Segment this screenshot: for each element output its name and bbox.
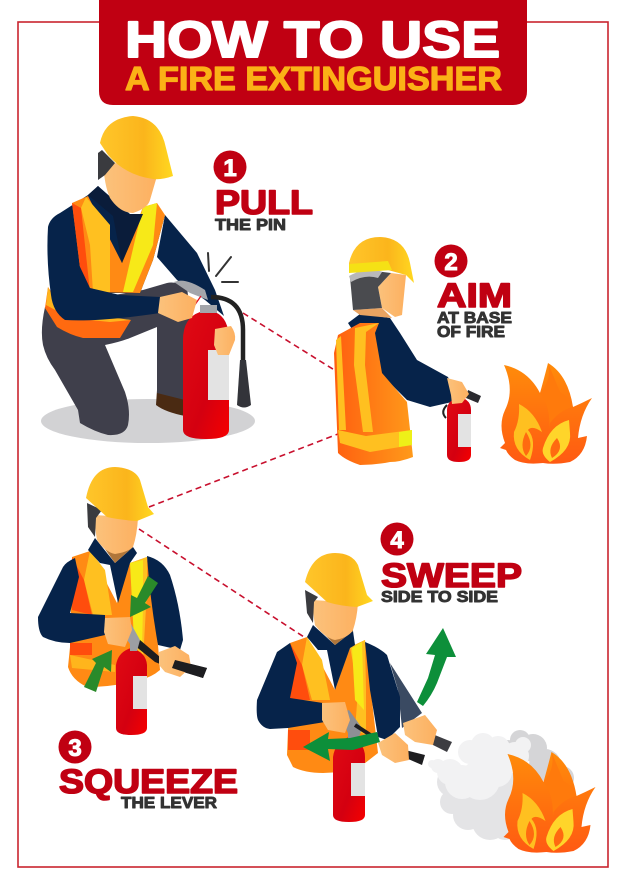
- connector: step 2 to step 3: [149, 434, 338, 507]
- subheading: THE LEVER: [121, 795, 217, 812]
- hat band shade: [349, 269, 382, 282]
- subheading: SIDE TO SIDE: [381, 589, 498, 606]
- hair: [87, 503, 102, 537]
- number badge: [380, 522, 414, 556]
- motion marks: [208, 253, 238, 282]
- hair: [98, 150, 115, 180]
- ghost hand: [403, 715, 437, 745]
- hose and handle: [134, 640, 207, 678]
- title line 2: A FIRE EXTINGUISHER: [125, 60, 502, 97]
- extinguisher label: [133, 676, 147, 709]
- torso shirt: [48, 186, 165, 293]
- neck and collar: [88, 186, 143, 263]
- step 2 illustration: worker aiming: [334, 237, 481, 465]
- shirt: [348, 314, 455, 407]
- number badge: [58, 730, 92, 764]
- neck: [353, 308, 392, 318]
- face: [378, 273, 406, 317]
- hair: [305, 590, 318, 623]
- valve lever: [123, 622, 140, 651]
- step 4 illustration: worker sweeping: [257, 553, 456, 822]
- vest band: [338, 430, 412, 452]
- hand on lever: [104, 617, 132, 647]
- left arm: [257, 643, 325, 729]
- hair: [350, 270, 391, 310]
- subheading line 2: OF FIRE: [437, 324, 505, 341]
- hard hat: [349, 237, 414, 283]
- hose: [355, 725, 375, 738]
- step 3 label: 3: [68, 735, 82, 762]
- connector: step 3 to step 4: [139, 529, 304, 637]
- hose: [211, 297, 243, 362]
- vest stripes: [336, 323, 379, 432]
- hand on lever: [322, 702, 350, 733]
- right arm: [365, 642, 400, 740]
- number badge: [214, 150, 246, 184]
- subheading line 1: AT BASE: [437, 310, 512, 327]
- extinguisher body: [447, 397, 471, 462]
- step 3 illustration: worker squeezing the lever: [38, 467, 207, 735]
- boot: [156, 390, 185, 416]
- vest stripes: [84, 551, 147, 660]
- valve lever: [343, 710, 362, 740]
- step 1 illustration: kneeling worker pulling the pin: [41, 116, 255, 443]
- heading: PULL: [215, 184, 313, 222]
- flames at step 4: [504, 752, 596, 853]
- mid smoke: [437, 767, 537, 840]
- trousers: [42, 282, 190, 435]
- number badge: [434, 244, 468, 278]
- vest: [68, 551, 160, 687]
- green arrow up: [417, 628, 456, 706]
- step 4 label: 4: [390, 527, 404, 554]
- right arm: [147, 556, 183, 650]
- heading: AIM: [437, 277, 512, 315]
- heading: SQUEEZE: [59, 763, 238, 801]
- front smoke: [428, 733, 531, 800]
- shirt placket: [88, 538, 137, 603]
- face: [313, 600, 358, 640]
- extinguisher body: [116, 648, 147, 735]
- vest: [334, 323, 413, 465]
- hand pulling pin: [158, 292, 197, 322]
- ghost arm showing sweep: [390, 663, 422, 728]
- extinguisher body: [183, 312, 229, 439]
- ground shadow: [41, 399, 255, 443]
- step 2 label: [434, 244, 512, 341]
- heading: SWEEP: [381, 557, 522, 595]
- shirt placket: [307, 625, 355, 690]
- hose nozzle: [237, 360, 251, 408]
- green arrow down: [130, 576, 158, 617]
- front hand: [378, 733, 409, 763]
- step 4 label: [380, 522, 522, 606]
- extinguisher label: [458, 414, 471, 447]
- subheading: THE PIN: [215, 217, 286, 234]
- hand: [447, 378, 469, 404]
- extinguisher label: [208, 350, 229, 400]
- extinguisher body: [333, 737, 365, 822]
- extinguisher label: [351, 763, 365, 796]
- green arrow up: [84, 650, 112, 692]
- hand holding extinguisher: [214, 326, 235, 355]
- title line 1: HOW TO USE: [125, 11, 500, 68]
- step 1 label: [214, 150, 313, 234]
- inner flames: [517, 793, 546, 849]
- hard hat: [86, 467, 154, 521]
- step 3 label: [58, 730, 238, 812]
- face: [103, 160, 157, 213]
- safety vest: [72, 196, 165, 293]
- front nozzle: [392, 747, 425, 765]
- hand on hose: [159, 646, 191, 677]
- hard hat: [305, 553, 373, 607]
- near arm: [47, 215, 160, 320]
- vest stripes: [302, 637, 366, 735]
- pin: [194, 296, 201, 306]
- hard hat: [100, 116, 173, 179]
- vest: [287, 637, 378, 773]
- inner flames: [514, 404, 542, 460]
- neck shadow: [315, 612, 353, 645]
- neck shadow: [97, 530, 133, 563]
- vest yellow stripes: [81, 197, 110, 292]
- face: [95, 515, 138, 554]
- flames at step 2: [500, 363, 592, 464]
- back smoke: [498, 730, 574, 790]
- hose loop: [443, 405, 447, 418]
- left arm: [38, 558, 105, 643]
- step 2 label: 2: [444, 249, 458, 276]
- far arm: [157, 215, 224, 316]
- green arrow left: [303, 732, 380, 761]
- extinguishing smoke: [428, 730, 574, 840]
- vest lower band: [45, 287, 131, 338]
- rear nozzle: [417, 729, 452, 752]
- nozzle: [466, 390, 481, 403]
- title banner: [99, 0, 527, 105]
- connector: step 1 to step 2: [243, 313, 336, 371]
- hat brim stripe: [349, 261, 392, 273]
- step 1 label: 1: [223, 155, 237, 182]
- extinguisher valve and lever: [174, 281, 217, 313]
